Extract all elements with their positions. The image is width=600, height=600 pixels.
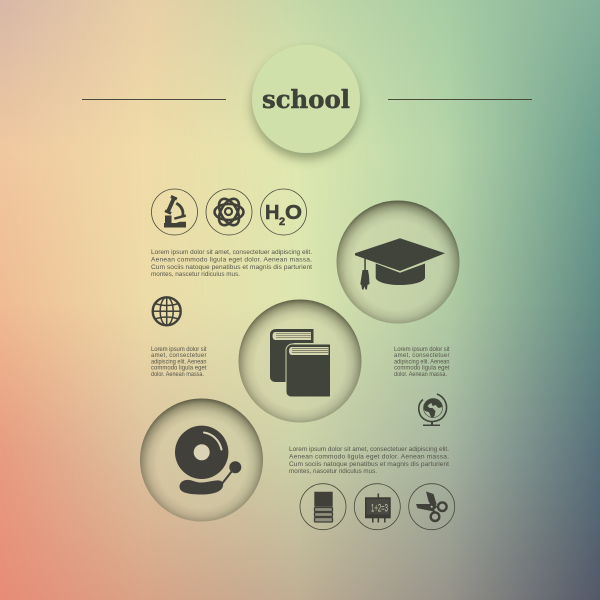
text block: left: Lorem ipsum dolor sit [151,347,207,353]
text block: bottom: Lorem ipsum dolor sit amet, consectetuer adipiscing elit. [289,446,449,453]
panel: graduation cap [336,200,460,324]
icon: chalkboard: 1+2=3 [371,502,388,514]
text block: bottom: Aenean commodo ligula eget dolor. Aenean massa. [289,453,449,460]
text block: right: dolor. Aenean massa. [394,372,447,378]
header rule right [388,99,532,100]
text block: top [151,249,312,278]
icon: stacked books [300,484,346,530]
text block: left: dolor. Aenean massa. [151,372,204,378]
icon: H2O: O [285,202,302,224]
text block: bottom [289,446,449,475]
icon: scissors [409,484,455,530]
text block: right: commodo ligula eget [394,366,450,372]
icon: H2O: H [265,202,279,224]
text block: right: adipiscing elit. Aenean [394,359,450,365]
icon: globe [153,297,181,325]
text block: top: Lorem ipsum dolor sit amet, consectetuer adipiscing elit. [151,249,312,256]
text block: top: montes, nascetur ridiculus mus. [151,271,240,278]
title: school [262,85,350,114]
icon: atom [206,189,252,235]
panel: bell [140,398,263,522]
text block: left: commodo ligula eget [151,366,207,372]
icon: H2O [260,189,306,235]
text block: right: amet, consectetuer [394,353,450,359]
text block: bottom: montes, nascetur ridiculus mus. [289,468,377,475]
header rule left [82,99,226,100]
icon: graduation cap [355,238,445,290]
title badge [252,45,360,153]
text block: top: Cum sociis natoque penatibus et magnis dis parturient [151,264,312,271]
icon: school bell [175,426,241,494]
text block: bottom: Cum sociis natoque penatibus et magnis dis parturient [289,461,449,468]
icon: H2O: 2 [279,216,285,228]
icon: books [270,329,330,397]
icon: desk globe [419,394,447,426]
text block: top: Aenean commodo ligula eget dolor. Aenean massa. [151,256,312,263]
text block: right [394,347,450,378]
text block: left: amet, consectetuer [151,353,206,359]
panel: books [238,300,362,422]
icon: microscope [152,189,198,235]
text block: left [151,347,207,378]
icon: chalkboard [354,484,400,530]
text block: right: Lorem ipsum dolor sit [394,347,450,353]
text block: left: adipiscing elit. Aenean [151,359,206,365]
